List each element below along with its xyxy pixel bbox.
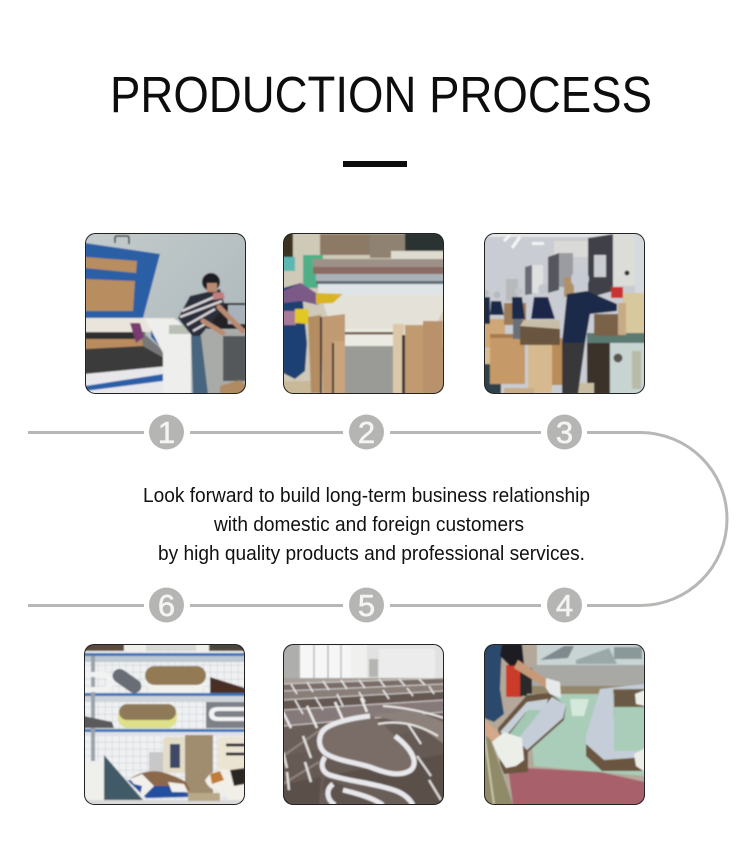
- center text block: Look forward to build long-term business relationship: [143, 485, 590, 507]
- foreground ribbon stack: [322, 716, 412, 772]
- step 4 badge: 4: [556, 588, 573, 623]
- step 1 badge: 1: [158, 415, 175, 450]
- photo 1: laser cutting machine: [85, 233, 246, 394]
- process line with curve: [28, 432, 727, 606]
- step 5 badge: [349, 588, 384, 623]
- far rows are drawn as alternating bands: [283, 678, 444, 684]
- center text block: with domestic and foreign customers: [213, 514, 524, 536]
- step 2 badge: 2: [358, 415, 375, 450]
- photo 5: rows of corrugated scratchers: [283, 644, 444, 805]
- step 3 badge: 3: [556, 415, 573, 450]
- photo 2: laminating cardboard: [283, 233, 444, 394]
- center text block: [143, 485, 590, 565]
- step 1 badge: [149, 414, 184, 450]
- step 6 badge: 6: [158, 588, 175, 623]
- photo 6: finished products on shelves with cats: [84, 644, 245, 805]
- photo 3: workers on the production line: [483, 233, 645, 394]
- title: PRODUCTION PROCESS: [110, 66, 652, 123]
- step 5 badge: 5: [358, 588, 375, 623]
- title underline: [343, 161, 407, 167]
- photo 4: gluing cardboard layers: [484, 644, 645, 805]
- step 6 badge: [149, 588, 184, 623]
- center text block: by high quality products and professional services.: [158, 543, 585, 565]
- step 2 badge: [349, 414, 384, 450]
- step 4 badge: [547, 588, 582, 623]
- step 3 badge: [547, 414, 582, 450]
